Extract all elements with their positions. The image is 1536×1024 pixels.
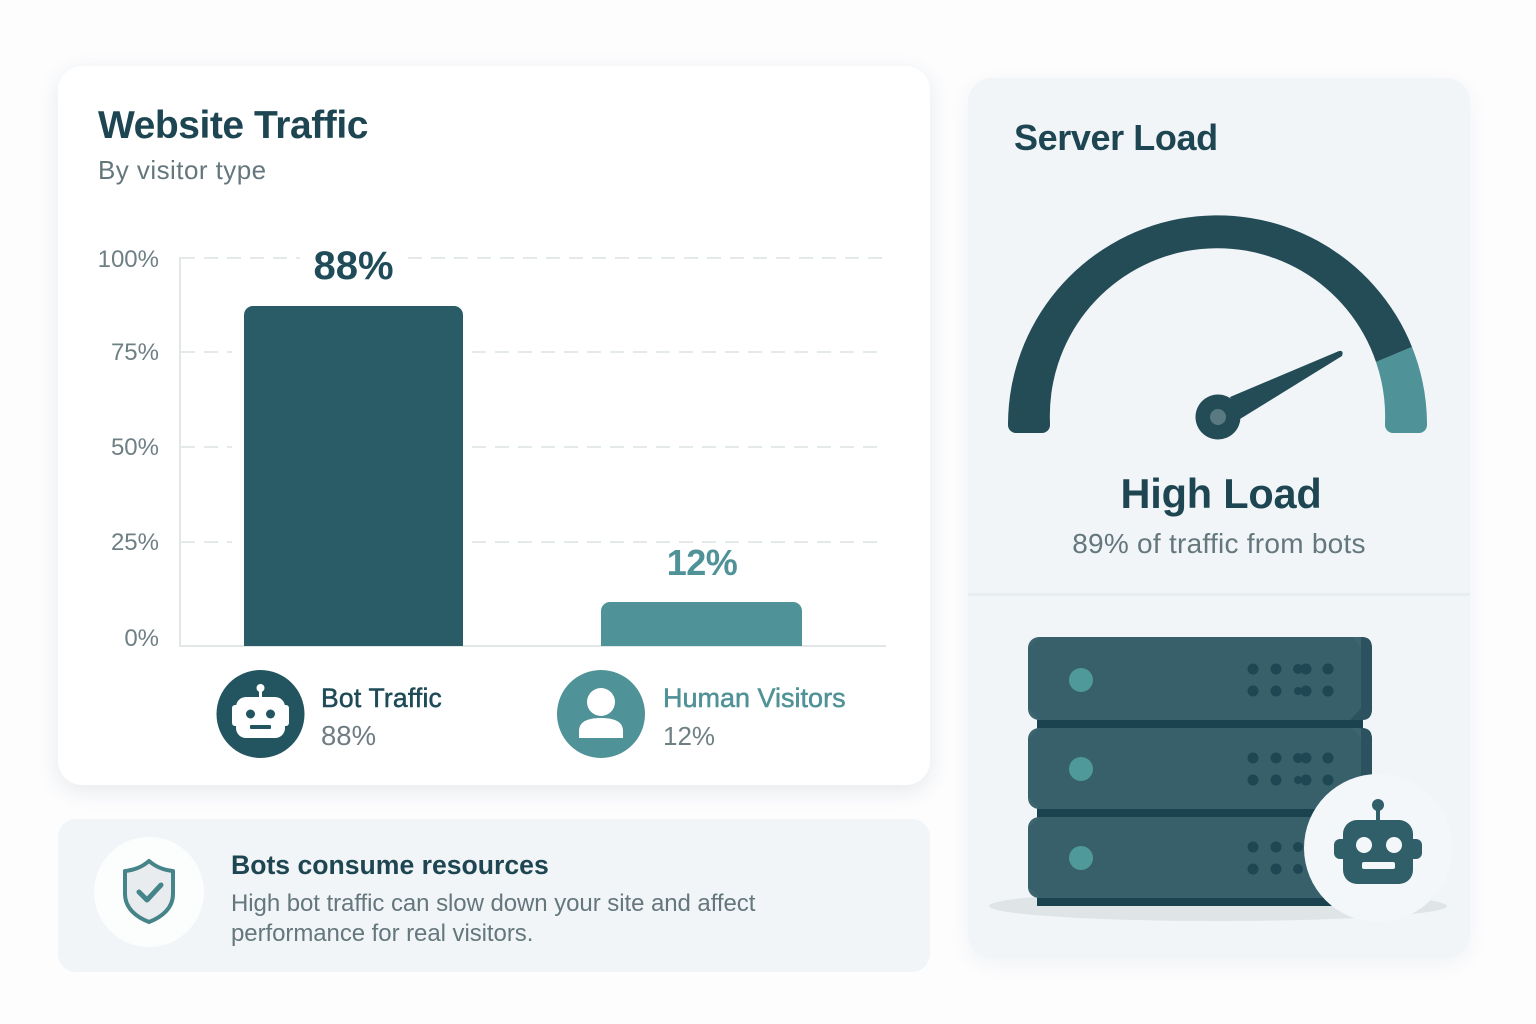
y-axis labels: 100% xyxy=(98,246,159,273)
panel: server load xyxy=(968,78,1470,958)
icon: robot in circle xyxy=(216,670,304,758)
callout body: performance for real visitors. xyxy=(231,920,533,947)
gauge arc: light segment xyxy=(1376,347,1427,433)
server illustration xyxy=(989,637,1447,921)
legend value: 12% xyxy=(663,721,715,751)
y-axis labels: 0% xyxy=(124,625,159,652)
gauge status: high load: High Load xyxy=(1120,470,1322,517)
callout: bots consume resources xyxy=(58,819,930,972)
heading: server load: Server Load xyxy=(1014,117,1218,158)
legend value: 88% xyxy=(321,720,376,751)
gauge needle xyxy=(1196,351,1343,440)
callout body xyxy=(231,890,756,947)
gauge arc: dark segment xyxy=(1008,215,1412,433)
y-axis labels: 75% xyxy=(111,339,159,366)
y-axis labels: 50% xyxy=(111,434,159,461)
value label: 88%: 88% xyxy=(313,244,394,288)
y-axis labels: 25% xyxy=(111,529,159,556)
legend label: Human Visitors xyxy=(663,683,846,713)
y-axis labels xyxy=(98,246,159,652)
bar chart xyxy=(98,244,886,652)
subheading: by visitor type: By visitor type xyxy=(98,155,267,185)
heading: website traffic: Website Traffic xyxy=(98,104,368,147)
panel: website traffic xyxy=(58,66,930,785)
gauge caption: 89% of traffic from bots xyxy=(1072,528,1366,559)
callout body: High bot traffic can slow down your site and affect xyxy=(231,890,755,917)
bar: human visitors xyxy=(601,602,802,646)
server unit 3 xyxy=(1028,817,1372,898)
bar: bot traffic xyxy=(244,306,463,646)
legend: human visitors xyxy=(557,670,846,758)
server unit 2 xyxy=(1028,728,1372,809)
icon: person in circle xyxy=(557,670,645,758)
icon: shield with check xyxy=(94,837,204,947)
robot badge xyxy=(1304,774,1452,922)
gauge xyxy=(1008,215,1427,440)
legend label: Bot Traffic xyxy=(321,683,442,713)
server unit 1 xyxy=(1028,637,1372,720)
value label: 12%: 12% xyxy=(667,542,738,583)
callout heading: Bots consume resources xyxy=(231,850,549,880)
legend: bot traffic xyxy=(216,670,442,758)
